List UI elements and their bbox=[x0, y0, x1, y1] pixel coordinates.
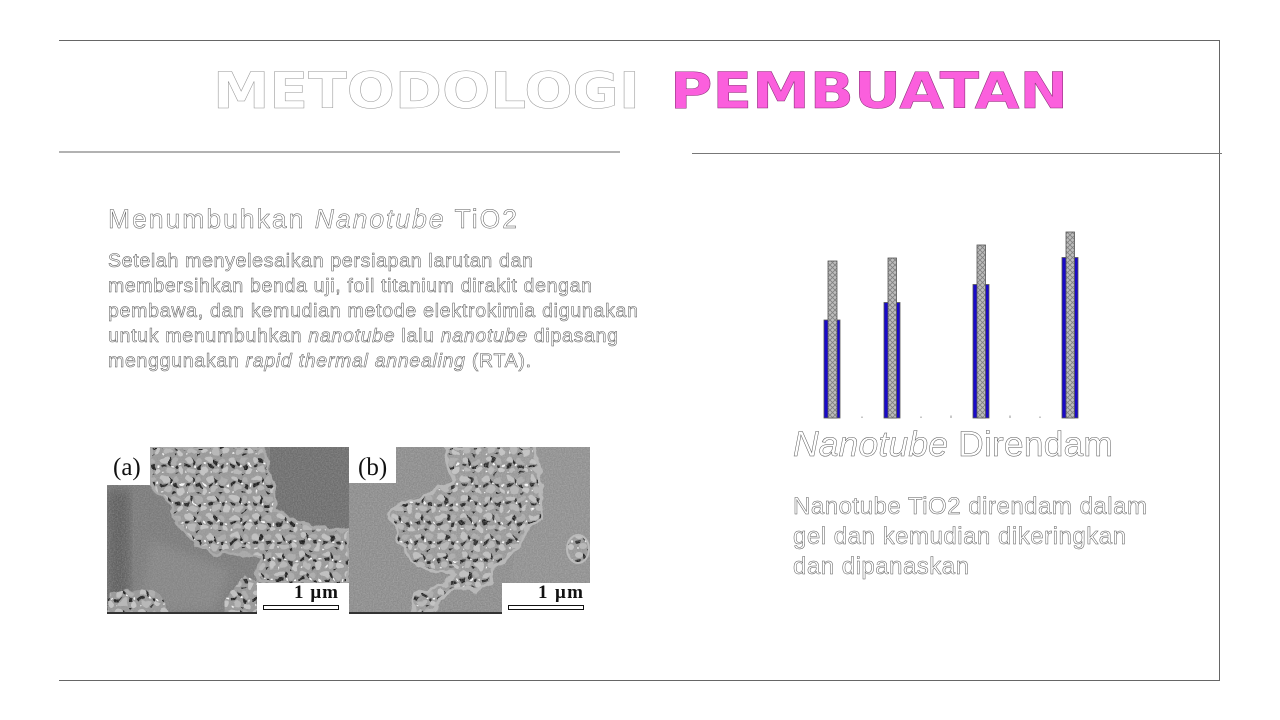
porous region bbox=[150, 447, 349, 583]
porous region bbox=[388, 447, 542, 614]
label a: (a) bbox=[113, 454, 141, 481]
title word: metodologi: METODOLOGI bbox=[213, 62, 640, 120]
bar group 3 bbox=[973, 245, 989, 418]
scale bar a: 1 μm bbox=[294, 582, 338, 603]
bar chart bbox=[824, 232, 1078, 418]
text block: growth description: membersihkan benda uji, foil titanium dirakit dengan bbox=[108, 275, 592, 297]
heading: menumbuhkan nanotube: Menumbuhkan Nanotube TiO2 bbox=[108, 204, 517, 234]
text block: growth description: pembawa, dan kemudian metode elektrokimia digunakan bbox=[108, 300, 638, 322]
text block: growth description: menggunakan rapid thermal annealing (RTA). bbox=[108, 350, 531, 372]
text block: growth description bbox=[108, 250, 638, 372]
text block: growth description: Setelah menyelesaikan persiapan larutan dan bbox=[108, 250, 533, 272]
scale bar b: 1 μm bbox=[538, 582, 583, 603]
micrograph b bbox=[349, 447, 590, 614]
text block: growth description: untuk menumbuhkan nanotube lalu nanotube dipasang bbox=[108, 325, 618, 347]
scale bar b bbox=[502, 582, 590, 614]
label b: (b) bbox=[358, 454, 387, 481]
title word: pembuatan: PEMBUATAN bbox=[670, 62, 1068, 120]
heading: nanotube direndam: Nanotube Direndam bbox=[793, 424, 1113, 464]
panel: nanotube direndam bbox=[793, 232, 1147, 580]
bar group 1 bbox=[824, 261, 840, 418]
panel: menumbuhkan nanotube bbox=[107, 204, 638, 614]
scale bar a bbox=[257, 582, 349, 614]
micrograph a bbox=[107, 447, 349, 614]
title bbox=[213, 62, 1068, 120]
bar group 4 bbox=[1062, 232, 1078, 418]
bar group 2 bbox=[884, 258, 900, 418]
label b bbox=[349, 447, 396, 483]
text block: soak description: dan dipanaskan bbox=[793, 553, 969, 580]
text block: soak description: Nanotube TiO2 direndam dalam bbox=[793, 493, 1147, 520]
text block: soak description: gel dan kemudian dikeringkan bbox=[793, 523, 1126, 550]
text block: soak description bbox=[793, 493, 1147, 580]
label a bbox=[107, 447, 150, 485]
